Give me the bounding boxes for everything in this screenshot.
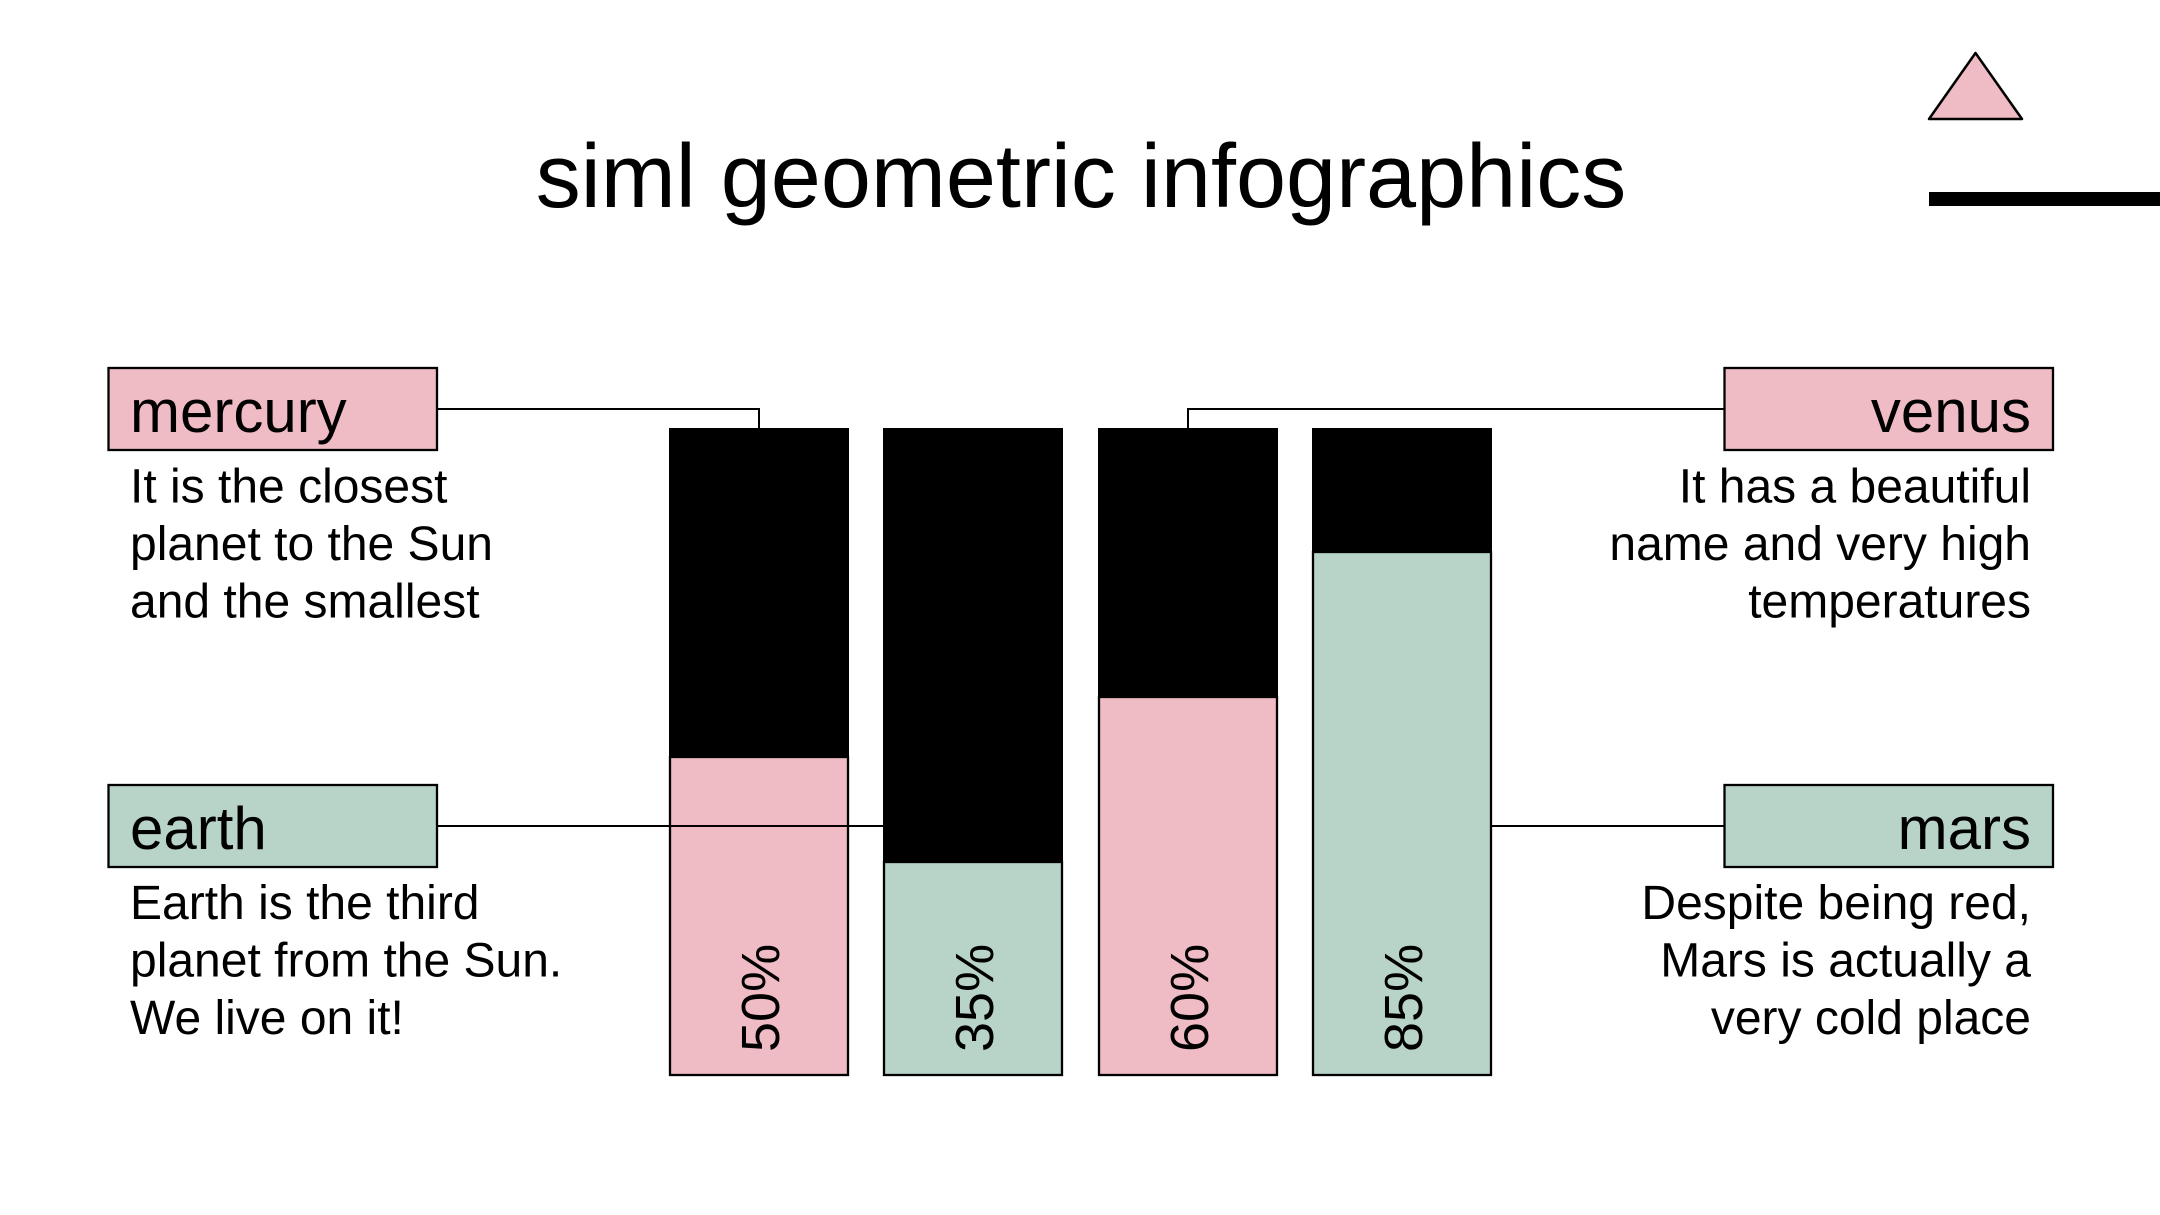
mars label: mars — [1898, 795, 2031, 862]
panel: earth — [108, 785, 562, 1045]
mars label box — [1724, 785, 2053, 867]
connector: mercury to bar 1 — [437, 409, 759, 429]
connector: venus to bar 3 — [1188, 409, 1724, 429]
bar chart — [670, 429, 1491, 1075]
connector: earth to bar 2 — [437, 825, 884, 827]
bar 3: 60%: 60% — [1160, 944, 1220, 1052]
earth description: planet from the Sun. — [130, 934, 562, 988]
bar 1: 50%: 50% — [731, 944, 791, 1052]
venus description: temperatures — [1748, 576, 2031, 628]
panel: venus — [1609, 368, 2053, 628]
earth description: We live on it! — [130, 992, 404, 1045]
mercury description: and the smallest — [130, 576, 480, 628]
panel: mercury — [108, 368, 493, 628]
panel: mars — [1641, 785, 2053, 1045]
bar 2: 35%: 35% — [945, 944, 1005, 1052]
earth label box — [108, 785, 437, 867]
connector: mars to bar 4 — [1491, 825, 1724, 827]
earth description: Earth is the third — [130, 877, 480, 930]
bar 1: 50% — [670, 429, 848, 1075]
mars description: Mars is actually a — [1660, 934, 2031, 988]
venus label box — [1724, 368, 2053, 450]
icon: pink triangle — [1929, 53, 2022, 119]
mercury label: mercury — [130, 378, 347, 445]
mercury description: It is the closest — [130, 460, 447, 514]
bar 3: 60% — [1099, 429, 1277, 1075]
mercury label box — [108, 368, 437, 450]
bar 2: 35% — [884, 429, 1062, 1075]
mars description: very cold place — [1711, 992, 2031, 1045]
venus description: name and very high — [1609, 518, 2031, 571]
mars description: Despite being red, — [1641, 877, 2031, 930]
bar 4: 85% — [1313, 429, 1491, 1075]
mercury description: planet to the Sun — [130, 518, 493, 571]
earth label: earth — [130, 795, 267, 862]
bar 4: 85%: 85% — [1374, 944, 1434, 1052]
title: siml geometric infographics — [536, 127, 1626, 227]
venus description: It has a beautiful — [1679, 460, 2031, 514]
decorative black bar — [1929, 192, 2160, 206]
venus label: venus — [1871, 378, 2031, 445]
